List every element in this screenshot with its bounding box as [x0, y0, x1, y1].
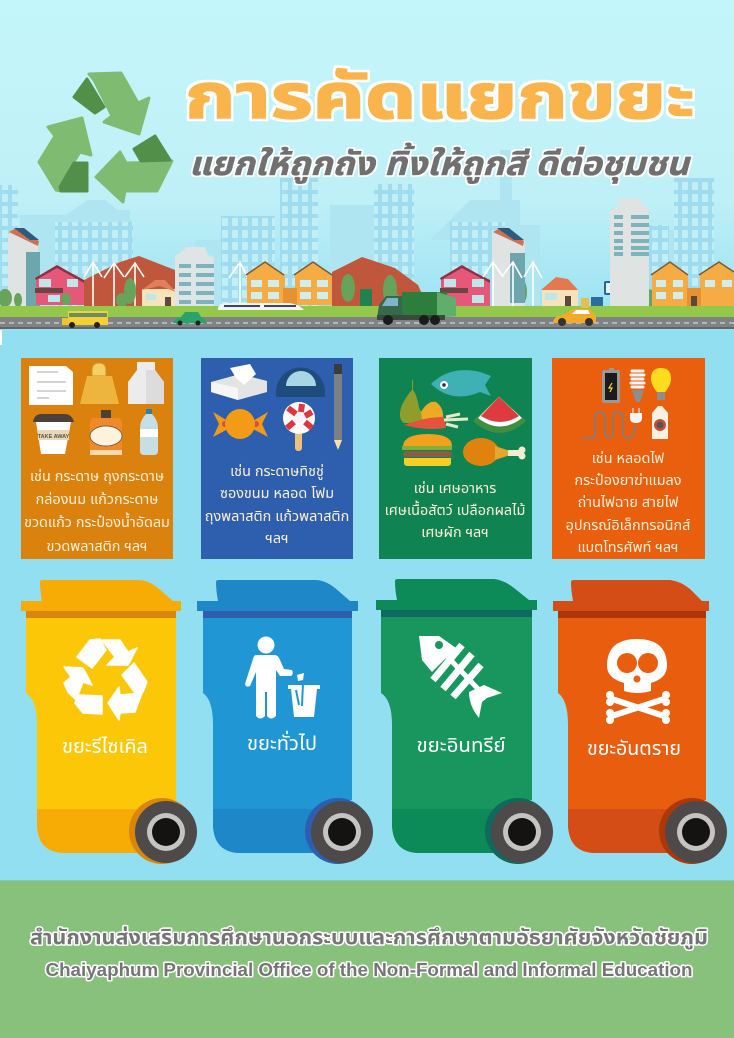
text: hazardous waste examples: กระป๋องยาฆ่าแมลง [574, 472, 682, 489]
text: hazardous waste examples: เช่น หลอดไฟ [592, 450, 664, 467]
icon: wrapped candy [213, 409, 268, 439]
pink house right [440, 265, 490, 306]
icon: pear [400, 380, 423, 423]
text: recyclable examples: ขวดแก้ว กระป๋องน้ำอัดลม [24, 512, 170, 531]
icon: green recycle arrows [39, 73, 172, 202]
bin body [203, 618, 352, 853]
solar building right [492, 228, 525, 306]
panel: recyclable examples [21, 358, 173, 559]
icon: protractor [276, 368, 325, 397]
bin body [381, 617, 532, 853]
icon: battery [602, 368, 620, 403]
label: ขยะทั่วไป [247, 730, 317, 755]
icon: light bulb [651, 368, 671, 400]
label: ขยะอินทรีย์ [416, 735, 506, 757]
panel: organic waste examples [379, 358, 532, 559]
icon: cable and plug [582, 408, 642, 438]
city skyline backdrop [0, 150, 714, 310]
icon: paper bag [80, 363, 119, 404]
icon: chicken leg [463, 438, 526, 466]
cream house [142, 280, 176, 306]
text: hazardous waste examples: ถ่านไฟฉาย สายไฟ [578, 494, 679, 511]
text: general waste examples: ซองขนม หลอด โฟม [220, 486, 334, 502]
text: hazardous waste examples [566, 450, 690, 556]
wheel [665, 801, 727, 863]
text: recyclable examples: กล่องนม แก้วกระดาษ [36, 491, 158, 508]
icon: fish bone [419, 636, 502, 718]
solar building left [8, 228, 40, 307]
bin: orange hazardous [553, 580, 727, 864]
school bus [62, 311, 108, 328]
tall white tower [610, 198, 649, 306]
wheel [311, 801, 373, 863]
label: ขยะรีไซเคิล [62, 736, 148, 758]
title: การคัดแยกขยะ [185, 63, 695, 132]
text: recyclable examples [24, 468, 170, 555]
icon: skull and crossbones [606, 639, 670, 724]
text: general waste examples: ถุงพลาสติก แก้วพลาสติก [205, 509, 349, 525]
icon: take away cup: TAKE AWAY [38, 434, 70, 440]
garbage truck [377, 292, 456, 325]
grass [0, 306, 734, 317]
label: ขยะอันตราย [587, 738, 681, 760]
bin: blue general [197, 580, 373, 864]
panel: general waste examples [201, 358, 353, 559]
icon: watermelon [473, 396, 526, 433]
orange houses centre [246, 262, 332, 305]
subtitle: แยกให้ถูกถัง ทิ้งให้ถูกสี ดีต่อชุมชน [189, 142, 692, 184]
bin: yellow recycling [21, 580, 197, 864]
text: organic waste examples: เศษเนื้อสัตว์ เปลือกผลไม้ [385, 500, 525, 519]
text: hazardous waste examples: แบตโทรศัพท์ ฯลฯ [577, 540, 679, 556]
pink house left [35, 265, 84, 305]
footer English office name: Chaiyaphum Provincial Office of the Non-Formal and Informal Education [46, 960, 692, 980]
green car [173, 312, 206, 326]
wheel [491, 801, 553, 863]
text: general waste examples [205, 463, 349, 547]
icon: insecticide spray [652, 406, 668, 439]
red hills [84, 256, 428, 307]
text: recyclable examples: ขวดพลาสติก ฯลฯ [46, 539, 148, 555]
text: organic waste examples: เช่น เศษอาหาร [414, 480, 496, 497]
text: organic waste examples [385, 480, 525, 541]
yellow car [553, 298, 596, 326]
bin body [26, 618, 176, 853]
icon: CFL lamp [631, 371, 644, 402]
lid [21, 580, 181, 611]
recycling street bins and sign [591, 281, 618, 307]
recycling bin booth [360, 289, 372, 307]
lid [197, 580, 358, 611]
lid [376, 579, 537, 610]
icon: pencil [334, 364, 342, 450]
city foreground [0, 198, 734, 329]
icon: white recycling symbol [64, 639, 147, 720]
gray office building [175, 247, 214, 306]
road [0, 317, 734, 329]
bin body [558, 618, 706, 853]
footer Thai office name: สำนักงานส่งเสริมการศึกษานอกระบบและการศึกษาตามอัธยาศัยจังหวัดชัยภูมิ [30, 927, 708, 949]
wheel [135, 801, 197, 863]
icon: plastic bottle [140, 409, 158, 455]
icon: flask bottle [90, 410, 122, 455]
icon: lollipop [283, 402, 315, 451]
text: general waste examples: เช่น กระดาษทิชชู่ [230, 463, 324, 480]
wind turbines left [84, 262, 248, 306]
icon: fish [431, 370, 491, 396]
panel: hazardous waste examples [552, 358, 705, 559]
text: hazardous waste examples: อุปกรณ์อิเล็กทรอนิกส์ [566, 518, 690, 534]
text: recyclable examples: เช่น กระดาษ ถุงกระดาษ [30, 468, 164, 485]
icon: milk carton [128, 362, 164, 404]
icon: paper sheet [29, 366, 73, 405]
train [218, 303, 304, 310]
icon: strawberry [421, 402, 443, 420]
icon: person throwing trash [245, 636, 320, 718]
small house right [541, 277, 578, 306]
icon: take away cup [33, 414, 74, 454]
icon: carrot and leaves [404, 414, 468, 429]
bin: green organic [376, 579, 553, 864]
orange houses right [651, 262, 734, 306]
text: general waste examples: ฯลฯ [265, 531, 289, 547]
wind turbines right [483, 262, 542, 306]
footer band [0, 880, 734, 1038]
icon: tissue box [211, 364, 267, 400]
text: organic waste examples: เศษผัก ฯลฯ [421, 525, 489, 541]
icon: burger [402, 434, 452, 466]
lid [553, 580, 709, 611]
trees [0, 274, 734, 307]
